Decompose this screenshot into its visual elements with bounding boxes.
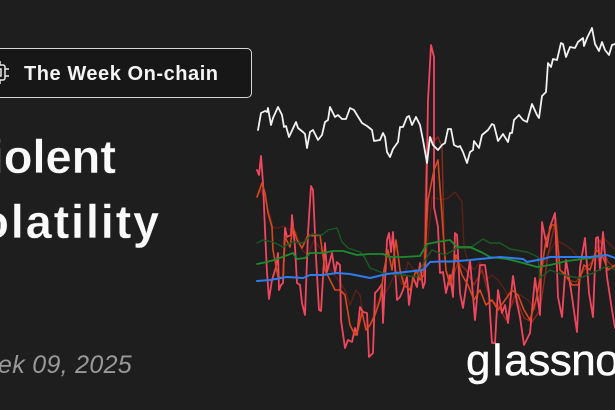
blue series <box>257 255 615 281</box>
orange series <box>257 160 615 335</box>
dark red spike series <box>420 137 615 322</box>
badge label: The Week On-chain <box>24 62 219 84</box>
darkest red series <box>257 190 615 330</box>
dark green series <box>257 228 615 278</box>
bright red series <box>257 45 615 357</box>
green series <box>257 240 615 267</box>
title <box>0 130 161 248</box>
icon: chip <box>0 61 9 84</box>
white price series <box>258 28 615 163</box>
badge: The Week On-chain <box>0 48 252 98</box>
